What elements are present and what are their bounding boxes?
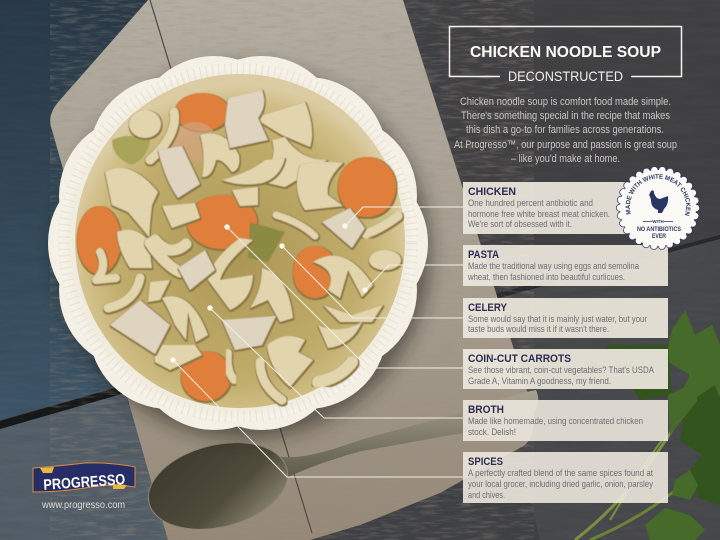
panel: spices: A perfectly crafted blend of the same spices found at — [468, 468, 653, 478]
chicken pieces — [110, 90, 365, 354]
panel: celery: CELERY — [468, 302, 507, 314]
badge: no antibiotics — [616, 166, 700, 250]
bowl rim — [48, 56, 428, 430]
website url: www.progresso.com — [41, 500, 125, 511]
spoon — [139, 390, 538, 540]
leader line: coin-cut carrots — [224, 224, 463, 368]
panel: chicken — [463, 182, 668, 234]
panel: spices: your local grocer, including dried garlic, onion, parsley — [468, 479, 653, 489]
panel: pasta: wheat, then fashioned into beautiful curlicues. — [467, 272, 625, 282]
leader line: chicken — [342, 207, 463, 229]
panel: chicken: One hundred percent antibiotic and — [468, 198, 593, 208]
badge text: ever: EVER — [652, 233, 666, 240]
panel: spices: and chives. — [468, 490, 505, 500]
logo: Progresso — [33, 463, 135, 494]
carrots — [77, 93, 396, 401]
wooden cutting board — [50, 0, 534, 540]
soup bowl — [48, 56, 431, 439]
parsley — [575, 310, 720, 540]
panel: broth: BROTH — [468, 404, 504, 416]
bowl shadow — [57, 65, 431, 439]
panel: broth: stock. Delish! — [468, 427, 516, 437]
badge small text: WITH — [652, 219, 664, 224]
intro text — [454, 96, 677, 165]
intro text: Chicken noodle soup is comfort food made simple. — [460, 96, 671, 108]
panel: spices — [463, 452, 668, 503]
panel: chicken: We're sort of obsessed with it. — [468, 219, 572, 229]
soup ingredients — [77, 90, 401, 401]
panel: pasta: Made the traditional way using eggs and semolina — [468, 261, 640, 271]
intro text: There's something special in the recipe that makes — [461, 110, 671, 122]
celery — [112, 136, 150, 165]
broth — [75, 74, 405, 408]
panel: pasta — [463, 245, 668, 286]
noodles — [96, 102, 401, 400]
panel: celery: Some would say that it is mainly just water, but your — [468, 314, 647, 324]
panel: celery — [463, 298, 668, 338]
leader line: celery — [279, 243, 463, 318]
panel: chicken: hormone free white breast meat chicken. — [468, 209, 610, 219]
panel: broth — [463, 400, 668, 441]
logo wordmark: PROGRESSO — [43, 471, 126, 494]
badge text: no antibiotics: NO ANTIBIOTICS — [637, 226, 681, 233]
leader line: pasta — [362, 265, 463, 293]
panel: spices: SPICES — [468, 456, 503, 468]
subtitle text: DECONSTRUCTED — [508, 68, 623, 84]
title text: CHICKEN NOODLE SOUP — [470, 44, 661, 61]
leader line: broth — [207, 305, 463, 418]
intro text: this dish a go-to for families across generations. — [466, 124, 664, 136]
intro text: At Progresso™, our purpose and passion is great soup — [454, 139, 677, 151]
panel: celery: taste buds would miss it if it wasn't there. — [468, 324, 609, 334]
intro text: – like you'd make at home. — [511, 153, 620, 165]
panel: coin-cut carrots: See those vibrant, coin-cut vegetables? That's USDA — [468, 365, 655, 375]
leader line: spices — [170, 357, 463, 477]
panel: coin-cut carrots: COIN-CUT CARROTS — [468, 353, 571, 365]
panel: coin-cut carrots: Grade A, Vitamin A goodness, my friend. — [468, 376, 611, 386]
panel: pasta: PASTA — [468, 249, 499, 261]
icon: chicken — [649, 190, 668, 213]
panel: coin-cut carrots — [463, 349, 668, 389]
badge curved text: MADE WITH WHITE MEAT CHICKEN — [626, 174, 690, 216]
panel: chicken: CHICKEN — [468, 186, 516, 198]
panel: broth: Made like homemade, using concentrated chicken — [468, 416, 643, 426]
title block — [450, 26, 682, 84]
